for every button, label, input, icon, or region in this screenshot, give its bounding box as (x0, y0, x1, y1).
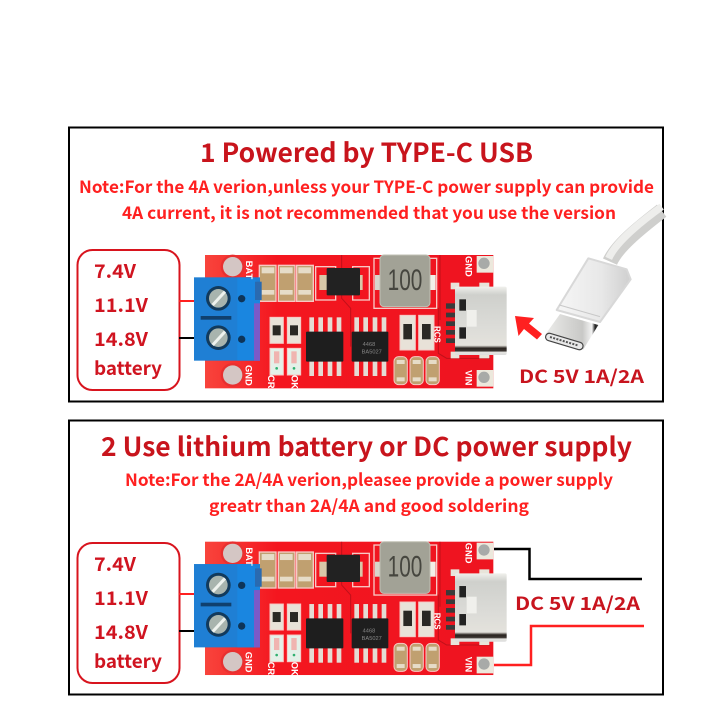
heading: Powered by TYPE-C USB: 1 Powered by TYPE-C USB (200, 133, 533, 170)
circuit board: GND (463, 543, 473, 564)
circuit board: CR (266, 375, 276, 389)
battery voltage box: 7.4V (94, 257, 136, 284)
battery voltage box: 7.4V (94, 550, 136, 577)
battery voltage box: 14.8V (94, 325, 148, 352)
circuit board: BAT (244, 261, 254, 279)
circuit board: GND (244, 652, 254, 673)
circuit board: BA5027 (362, 636, 382, 642)
icon: USB-C cable (545, 207, 662, 349)
battery voltage box: 11.1V (94, 584, 148, 611)
label: DC 5V: DC 5V 1A/2A (519, 363, 645, 389)
circuit board: VIN (463, 657, 473, 673)
circuit board: BAT (244, 547, 254, 566)
panel 1 frame (69, 128, 663, 402)
heading: Use lithium battery: 2 Use lithium battery or DC power supply (101, 427, 632, 464)
circuit board: BA5027 (362, 349, 382, 355)
battery voltage box: battery (94, 354, 162, 381)
circuit board: VIN (463, 370, 473, 386)
panel 2 frame (69, 420, 663, 694)
battery voltage box: 14.8V (94, 618, 148, 645)
battery voltage box (78, 543, 180, 683)
circuit board: 4468 (363, 629, 375, 635)
battery wires (179, 301, 196, 338)
note text: Note:For the 4A verion,unless your TYPE-C power supply can provide (79, 173, 654, 198)
black DC wire (494, 549, 642, 579)
circuit board (194, 255, 507, 389)
circuit board: 4468 (363, 342, 375, 348)
circuit board: CR (266, 662, 276, 675)
label: DC 5V: DC 5V 1A/2A (515, 590, 641, 616)
note text: 4A current, it is not recommended that you use the version (122, 199, 616, 224)
arrow pointing to USB port (515, 316, 542, 340)
circuit board: GND (463, 256, 473, 277)
circuit board: GND (244, 365, 254, 386)
circuit board: RCS (433, 326, 442, 344)
circuit board: OK (290, 662, 300, 676)
battery voltage box: battery (94, 647, 162, 674)
note text: greatr than 2A/4A and good soldering (209, 492, 529, 517)
circuit board: RCS (433, 613, 442, 630)
red DC wire (494, 626, 644, 665)
panel: powered by TYPE-C USB (69, 128, 663, 402)
battery wires (179, 594, 196, 631)
circuit board: 100 (388, 264, 422, 297)
battery voltage box: 11.1V (94, 291, 148, 318)
note text (79, 173, 654, 224)
circuit board: OK (290, 375, 300, 389)
note text: Note:For the 2A/4A verion,pleasee provide a power supply (125, 466, 613, 491)
circuit board (194, 541, 507, 676)
battery voltage box (78, 250, 180, 390)
circuit board: 100 (388, 551, 422, 584)
note text (125, 466, 613, 517)
panel: lithium battery or DC supply (69, 420, 663, 694)
